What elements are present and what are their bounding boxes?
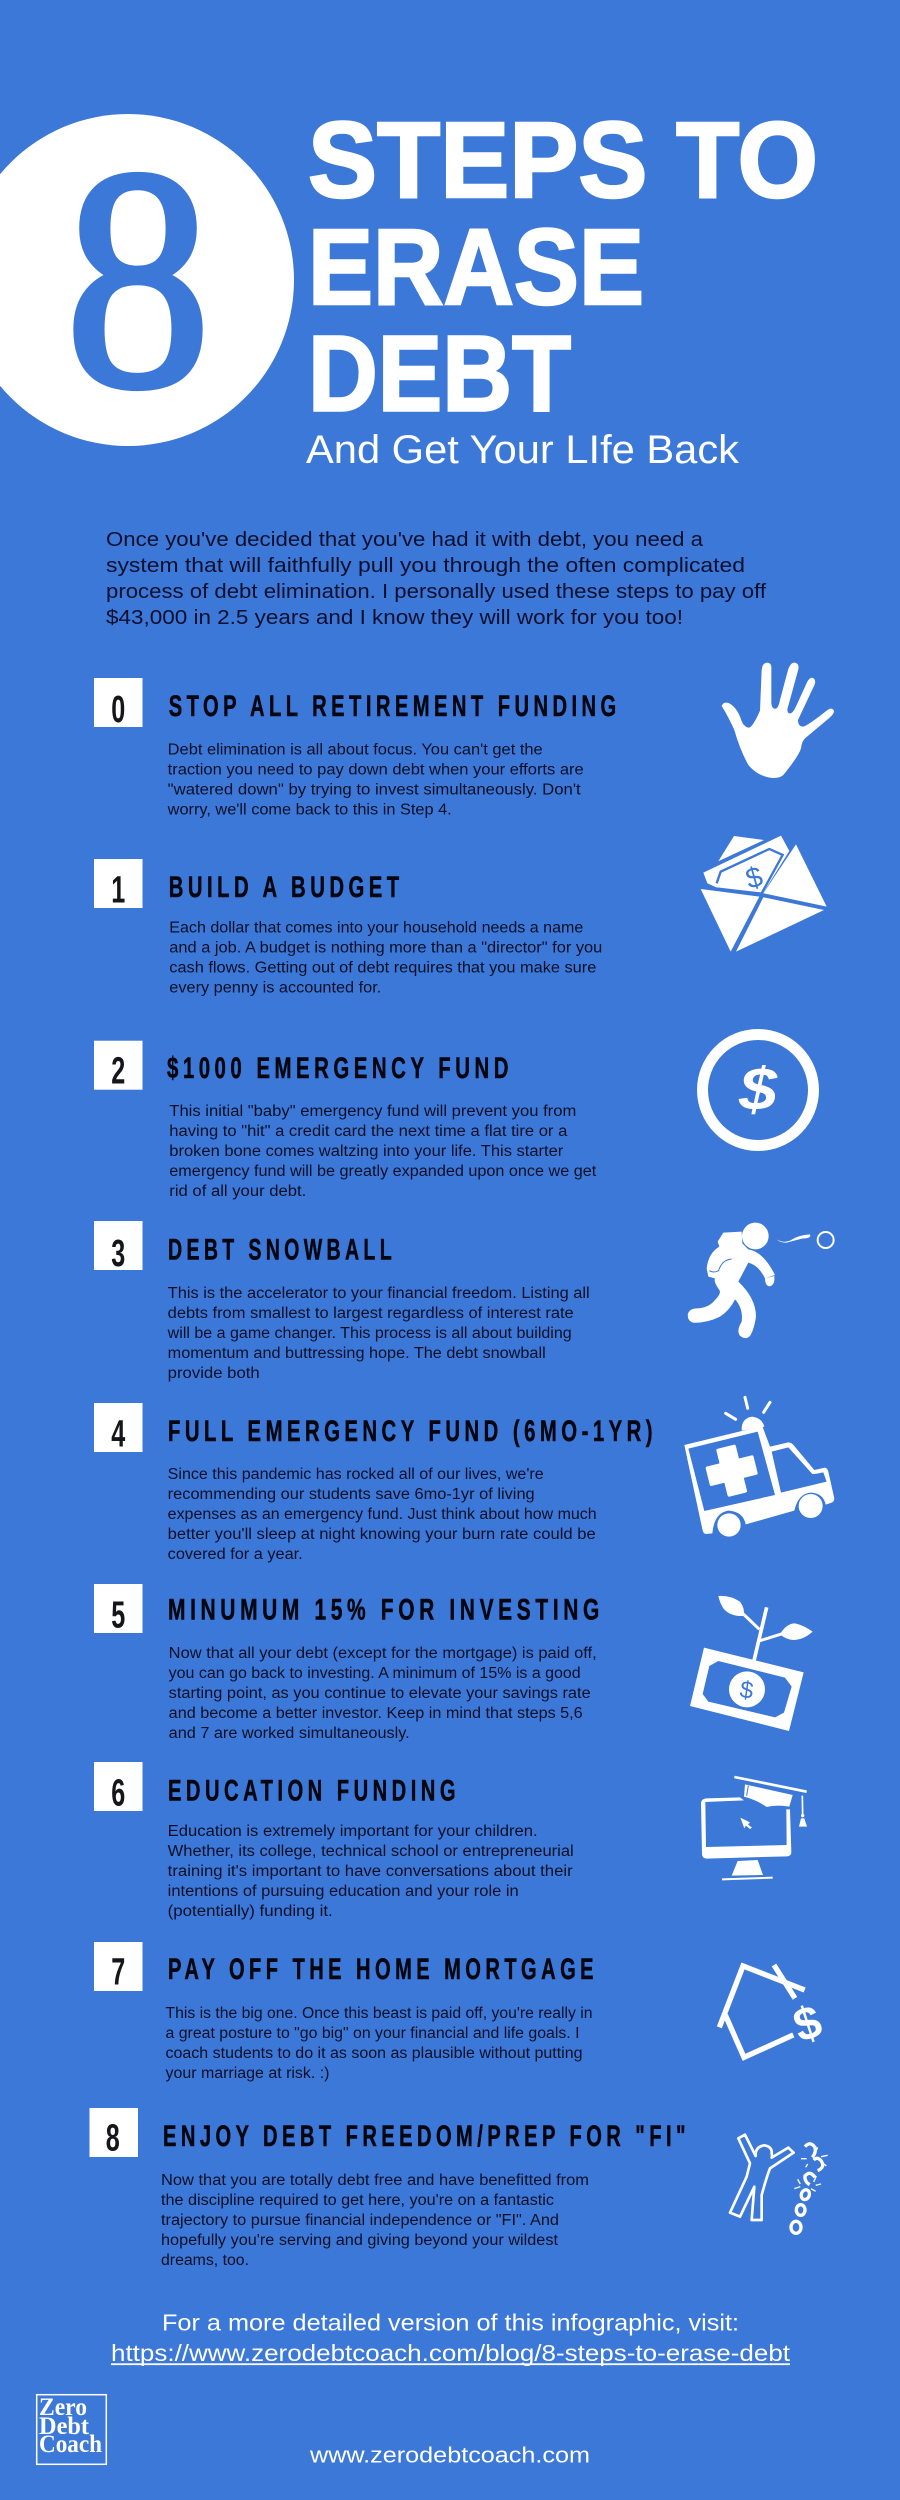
body 0: worry, we'll come back to this in Step 4. — [167, 802, 452, 819]
heading 3: DEBT SNOWBALL — [168, 1234, 396, 1267]
number box 2: 2 — [111, 1050, 125, 1092]
website url: www.zerodebtcoach.com — [309, 2443, 590, 2468]
body 6: intentions of pursuing education and your role in — [168, 1883, 519, 1900]
body 8: trajectory to pursue financial independence or "FI". And — [161, 2212, 559, 2229]
step 3 — [94, 1221, 590, 1382]
body 4: Since this pandemic has rocked all of our lives, we're — [168, 1466, 544, 1483]
number box 5 — [94, 1584, 142, 1636]
body 1: cash flows. Getting out of debt requires that you make sure — [169, 960, 596, 976]
intro paragraph — [106, 528, 766, 629]
number box 8 — [90, 2108, 138, 2160]
icon: ambulance — [684, 1397, 834, 1537]
body 3: will be a game changer. This process is all about building — [167, 1325, 572, 1342]
body 5: Now that all your debt (except for the mortgage) is paid off, — [169, 1645, 597, 1662]
number box 4 — [94, 1403, 142, 1456]
body 5: and become a better investor. Keep in mind that steps 5,6 — [169, 1705, 583, 1722]
number box 4: 4 — [111, 1414, 125, 1456]
number box 7: 7 — [111, 1952, 125, 1994]
body 7: a great posture to "go big" on your financial and life goals. I — [166, 2025, 580, 2042]
hero badge: big 8 in white circle: 8 — [65, 104, 211, 454]
step 0 — [94, 678, 621, 819]
body 4: better you'll sleep at night knowing your burn rate could be — [168, 1526, 596, 1543]
body 8: dreams, too. — [161, 2252, 249, 2269]
body 5: starting point, as you continue to elevate your savings rate — [169, 1685, 591, 1702]
intro paragraph: process of debt elimination. I personally used these steps to pay off — [106, 580, 766, 603]
footer note: https://www.zerodebtcoach.com/blog/8-steps-to-erase-debt — [111, 2340, 791, 2366]
body 3: momentum and buttressing hope. The debt snowball — [168, 1345, 546, 1362]
icon: money plant — [690, 1596, 813, 1731]
number box 7 — [94, 1942, 142, 1994]
body 4: expenses as an emergency fund. Just think about how much — [168, 1506, 597, 1523]
heading 5: MINUMUM 15% FOR INVESTING — [168, 1594, 604, 1627]
body 3: This is the accelerator to your financial freedom. Listing all — [168, 1285, 590, 1302]
number box 6: 6 — [111, 1772, 125, 1814]
body 5: you can go back to investing. A minimum of 15% is a good — [169, 1665, 581, 1682]
body 8: the discipline required to get here, you're on a fantastic — [161, 2192, 554, 2209]
number box 6 — [94, 1762, 142, 1814]
step 2 — [94, 1041, 597, 1200]
body 8 — [161, 2172, 589, 2269]
body 5: and 7 are worked simultaneously. — [169, 1725, 410, 1742]
heading 7: PAY OFF THE HOME MORTGAGE — [168, 1953, 598, 1986]
title: STEPS TO — [308, 99, 818, 220]
icon: runner chasing snowball — [688, 1223, 834, 1338]
body 6: Whether, its college, technical school or entrepreneurial — [168, 1843, 574, 1860]
heading 6: EDUCATION FUNDING — [168, 1775, 460, 1808]
step 6 — [94, 1762, 574, 1920]
body 3 — [167, 1285, 590, 1382]
body 6: training it's important to have conversations about their — [168, 1863, 573, 1880]
icon: computer with graduation cap — [701, 1777, 807, 1879]
number box 0 — [94, 678, 142, 731]
body 7: your marriage at risk. :) — [166, 2065, 330, 2082]
title: ERASE — [308, 206, 644, 327]
heading 1: BUILD A BUDGET — [169, 871, 404, 904]
body 0: Debt elimination is all about focus. You can't get the — [168, 742, 543, 759]
logo: Zero Debt Coach: Zero — [39, 2394, 87, 2421]
subtitle: And Get Your LIfe Back — [306, 428, 740, 472]
step 1 — [94, 859, 602, 996]
body 1: Each dollar that comes into your household needs a name — [169, 920, 583, 936]
icon: dollar coin: $ — [738, 1056, 778, 1123]
step 7 — [94, 1942, 598, 2082]
icon: money plant: $ — [738, 1676, 755, 1705]
step 5 — [94, 1584, 604, 1742]
body 4: covered for a year. — [168, 1546, 303, 1563]
body 8: Now that you are totally debt free and have benefitted from — [161, 2172, 589, 2189]
icon: house with dollar: $ — [787, 1995, 828, 2052]
icon: dollar coin — [702, 1034, 814, 1146]
icon: envelope with money — [701, 836, 827, 952]
number box 8: 8 — [106, 2118, 120, 2160]
number box 1: 1 — [111, 870, 125, 912]
logo: Zero Debt Coach: Debt — [39, 2413, 90, 2440]
number box 1 — [94, 859, 142, 912]
heading 2: $1000 EMERGENCY FUND — [167, 1052, 513, 1085]
hero badge: big 8 in white circle — [0, 104, 294, 454]
heading 0: STOP ALL RETIREMENT FUNDING — [169, 690, 621, 723]
step 4 — [94, 1403, 657, 1563]
intro paragraph: Once you've decided that you've had it with debt, you need a — [106, 528, 704, 551]
title — [308, 99, 818, 434]
body 7: coach students to do it as soon as plausible without putting — [166, 2045, 582, 2062]
intro paragraph: system that will faithfully pull you through the often complicated — [106, 554, 745, 577]
body 2: broken bone comes waltzing into your life. This starter — [169, 1143, 563, 1160]
number box 0: 0 — [111, 689, 125, 731]
icon: envelope with money: $ — [742, 861, 766, 896]
body 2: This initial "baby" emergency fund will prevent you from — [169, 1103, 576, 1120]
body 7 — [166, 2005, 592, 2082]
body 1: and a job. A budget is nothing more than a "director" for you — [169, 940, 602, 956]
body 8: hopefully you're serving and giving beyond your wildest — [161, 2232, 559, 2249]
footer note: For a more detailed version of this infographic, visit: — [162, 2310, 739, 2336]
number box 3: 3 — [111, 1233, 125, 1275]
body 1: every penny is accounted for. — [169, 980, 381, 996]
number box 5: 5 — [111, 1594, 125, 1636]
heading 4: FULL EMERGENCY FUND (6MO-1YR) — [168, 1415, 657, 1448]
body 7: This is the big one. Once this beast is paid off, you're really in — [166, 2005, 592, 2022]
step 8 — [90, 2108, 690, 2269]
body 2: having to "hit" a credit card the next time a flat tire or a — [169, 1123, 568, 1140]
body 4: recommending our students save 6mo-1yr of living — [168, 1486, 535, 1503]
body 6: (potentially) funding it. — [168, 1903, 333, 1920]
body 1 — [169, 920, 602, 996]
body 0: "watered down" by trying to invest simultaneously. Don't — [168, 782, 581, 799]
icon: hand — [722, 663, 834, 778]
body 0: traction you need to pay down debt when your efforts are — [168, 762, 584, 779]
body 4 — [168, 1466, 597, 1563]
body 2 — [169, 1103, 597, 1200]
icon: house with dollar — [719, 1965, 828, 2057]
title: DEBT — [308, 313, 571, 434]
body 6 — [168, 1823, 574, 1920]
body 0 — [167, 742, 584, 819]
body 2: emergency fund will be greatly expanded upon once we get — [169, 1163, 597, 1180]
body 5 — [169, 1645, 597, 1742]
number box 2 — [94, 1041, 142, 1092]
body 2: rid of all your debt. — [169, 1183, 306, 1200]
logo: Zero Debt Coach — [37, 2394, 106, 2464]
intro paragraph: $43,000 in 2.5 years and I know they will work for you too! — [106, 606, 683, 629]
number box 3 — [94, 1221, 142, 1275]
logo: Zero Debt Coach: Coach — [39, 2431, 102, 2458]
icon: person with broken chain — [730, 2135, 828, 2233]
body 3: provide both — [168, 1365, 260, 1382]
body 3: debts from smallest to largest regardless of interest rate — [168, 1305, 574, 1322]
body 6: Education is extremely important for your children. — [168, 1823, 538, 1840]
footer note — [111, 2310, 791, 2366]
